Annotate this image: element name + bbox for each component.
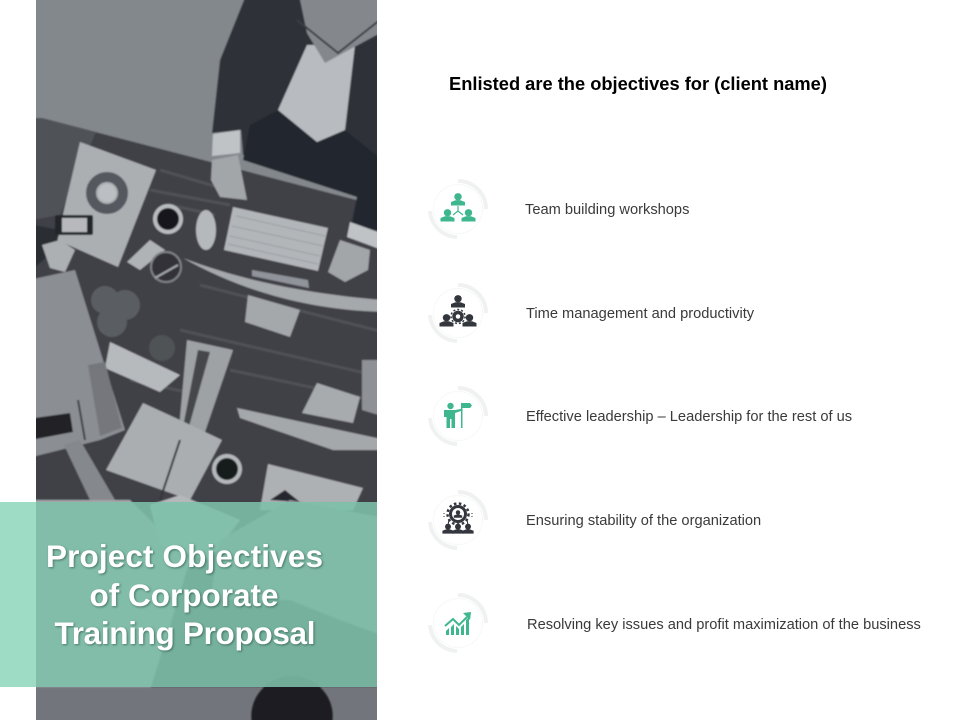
cuffs [212, 130, 240, 156]
monitor [183, 258, 395, 312]
hands [211, 155, 247, 200]
white card under plant [105, 342, 180, 392]
objective 2: time management: Time management and productivity [526, 306, 755, 322]
man face [299, 0, 377, 63]
keyboard [224, 207, 328, 271]
icon: person with flag [430, 388, 486, 444]
plant [91, 286, 140, 337]
title: of Corporate [90, 577, 278, 613]
desk [36, 132, 377, 688]
objective 4: ensuring stability [430, 492, 761, 548]
title: Training Proposal [54, 615, 316, 651]
arm [64, 440, 115, 500]
objective 5: resolving key issues [430, 595, 921, 651]
lower shapes beneath banner [36, 499, 189, 688]
title [46, 538, 323, 651]
title: Project Objectives [46, 538, 323, 574]
banner: title background [0, 502, 377, 687]
monitor 2 [302, 383, 360, 423]
keyboard 2 [260, 464, 363, 510]
bowl [151, 252, 181, 282]
panel: office desk photo [20, 0, 395, 720]
objective 5: resolving key issues: Resolving key issues and profit maximization of the business [527, 617, 921, 633]
phone and hand [36, 225, 60, 266]
mouse [196, 210, 216, 250]
man jacket [212, 0, 377, 222]
objective 3: effective leadership: Effective leadership – Leadership for the rest of us [526, 409, 852, 425]
notebook chart [88, 362, 122, 436]
left paper [36, 269, 126, 457]
objective 1: team building workshops: Team building workshops [525, 202, 689, 218]
man shirt [278, 45, 355, 142]
data paper [57, 142, 156, 267]
icon: three connected people [430, 181, 486, 237]
objective 1: team building workshops [430, 181, 689, 237]
objective 2: time management [430, 285, 755, 341]
folders [178, 340, 233, 440]
dark phone [36, 412, 74, 440]
glass [149, 335, 175, 361]
heading: Enlisted are the objectives for (client name) [449, 73, 827, 94]
cup 2 [212, 454, 242, 484]
stapler [127, 240, 165, 270]
head at bottom [250, 687, 334, 720]
objective 4: ensuring stability: Ensuring stability of the organization [526, 513, 761, 529]
cup [153, 204, 183, 234]
icon: gear with three people [430, 492, 486, 548]
icon: people around gear [430, 285, 486, 341]
objective 3: effective leadership [430, 388, 852, 444]
center document [106, 403, 222, 500]
icon: rising bar chart [430, 595, 486, 651]
